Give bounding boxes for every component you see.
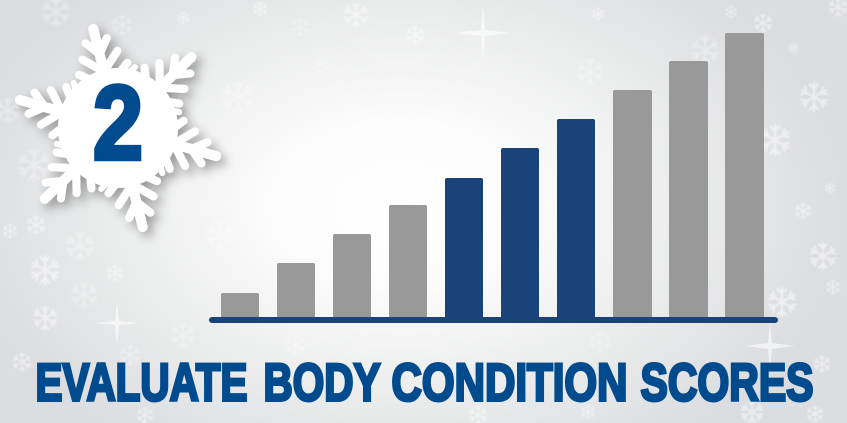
title: EVALUATE — [36, 354, 247, 413]
axis line — [209, 317, 778, 323]
bar chart — [209, 33, 778, 323]
gray bars, low scores — [221, 205, 427, 319]
snowflake badge — [13, 22, 223, 234]
title: CONDITION — [392, 354, 628, 413]
title — [36, 354, 814, 413]
number 2: 2 — [93, 65, 143, 182]
sparkle stars — [95, 5, 795, 370]
title: BODY — [264, 354, 380, 413]
blue bars, target scores — [445, 119, 595, 319]
gray bars, high scores — [613, 33, 764, 319]
